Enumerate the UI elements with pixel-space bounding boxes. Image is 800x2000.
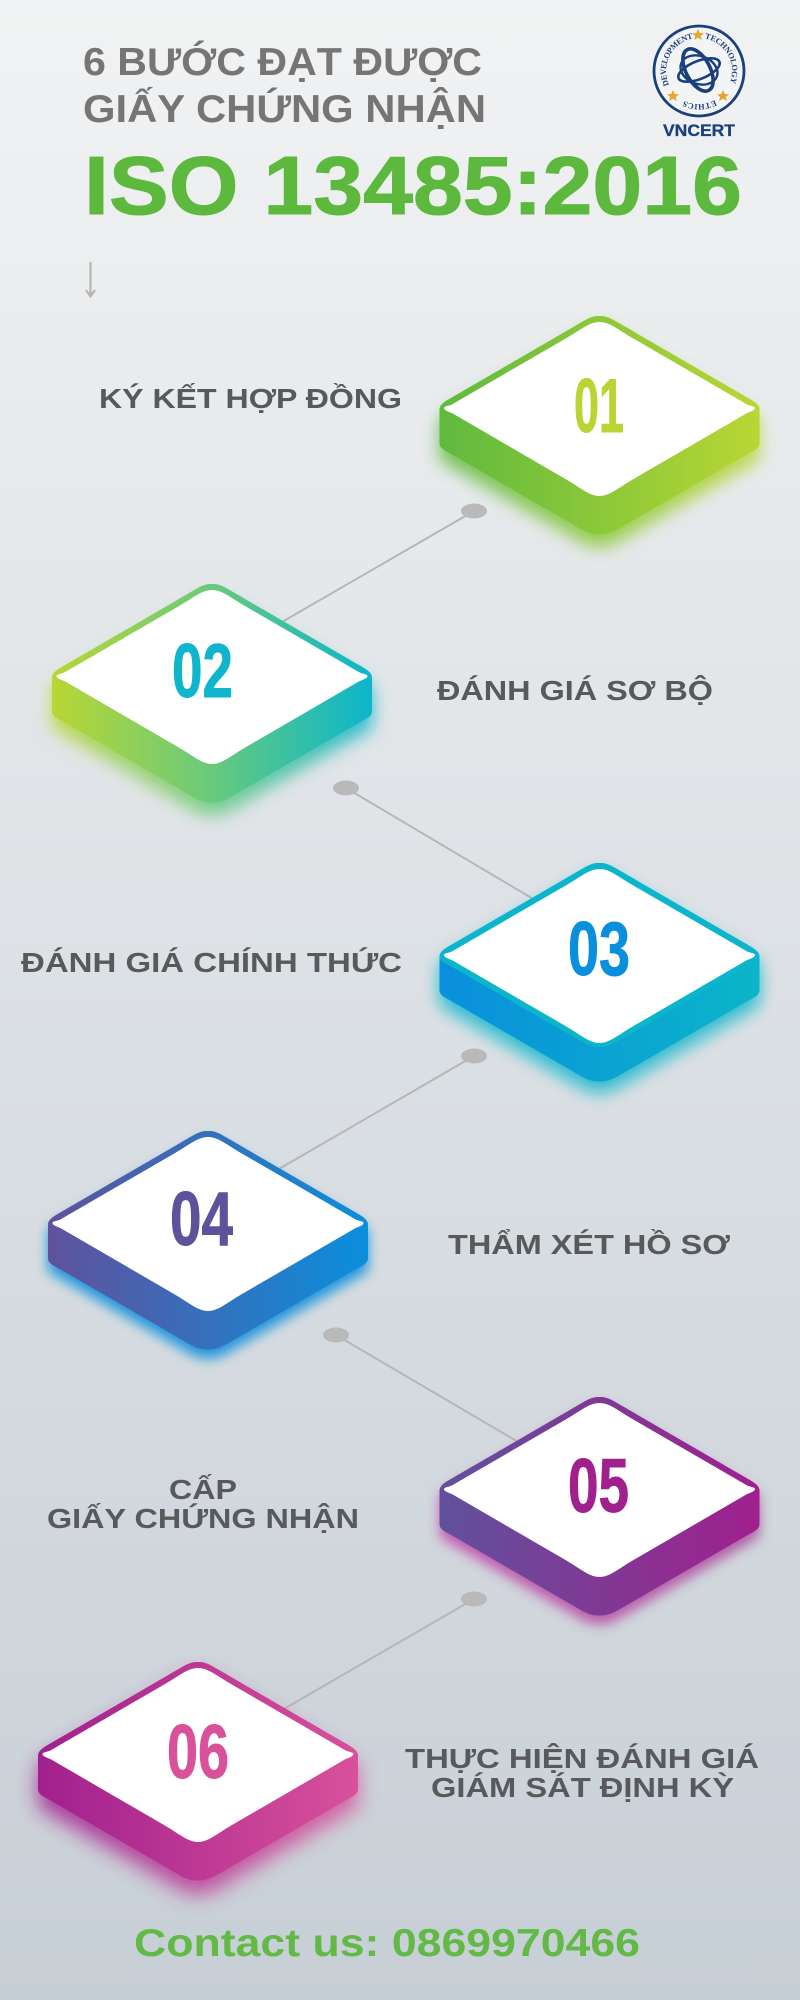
step 02 tile — [52, 584, 372, 816]
connector: step 1 to step 2 — [275, 504, 487, 626]
connector: step 2 to step 3 — [333, 780, 540, 903]
step 06 label — [405, 1743, 759, 1803]
step 02 number: 02 — [172, 629, 233, 714]
step 02 label: ĐÁNH GIÁ SƠ BỘ — [437, 674, 713, 706]
title: ISO 13485:2016: ISO 13485:2016 — [84, 139, 742, 232]
step 05 label: CẤP — [169, 1474, 237, 1505]
step 04 number: 04 — [170, 1177, 233, 1262]
title: 6 bước đạt được giấy chứng nhận — [83, 40, 486, 131]
step 03 number: 03 — [568, 907, 630, 992]
logo: VNCERT seal: DEVELOPMENT — [660, 33, 692, 87]
step 05 tile — [440, 1397, 760, 1624]
connector: step 5 to step 6 — [277, 1592, 487, 1713]
step 01 number: 01 — [574, 364, 624, 449]
contact line: Contact us: 0869970466 — [134, 1922, 640, 1965]
step 06 label: GIÁM SÁT ĐỊNH KỲ — [431, 1772, 734, 1803]
title: 6 bước đạt được giấy chứng nhận: GIẤY CHỨNG NHẬN — [83, 87, 486, 131]
logo: VNCERT seal — [652, 24, 746, 140]
step 06 label: THỰC HIỆN ĐÁNH GIÁ — [405, 1743, 759, 1774]
title: 6 bước đạt được giấy chứng nhận: 6 BƯỚC ĐẠT ĐƯỢC — [83, 40, 482, 84]
step 05 number: 05 — [568, 1444, 629, 1529]
connector: step 3 to step 4 — [272, 1048, 487, 1173]
step 01 label: KÝ KẾT HỢP ĐỒNG — [99, 383, 402, 414]
connector: step 4 to step 5 — [323, 1328, 525, 1446]
step 04 label: THẨM XÉT HỒ SƠ — [448, 1229, 730, 1260]
step 06 tile — [38, 1662, 358, 1894]
step 04 tile — [48, 1131, 368, 1358]
step 03 label: ĐÁNH GIÁ CHÍNH THỨC — [21, 947, 402, 978]
logo: VNCERT seal: ETHICS — [682, 100, 718, 110]
step 03 tile — [440, 863, 760, 1092]
step 05 label: GIẤY CHỨNG NHẬN — [47, 1503, 359, 1534]
step 05 label — [47, 1474, 359, 1534]
arrow: down — [86, 262, 95, 296]
logo: VNCERT seal: VNCERT — [663, 121, 736, 140]
logo: VNCERT seal: TECHNOLOGY — [706, 33, 738, 84]
step 06 number: 06 — [167, 1710, 229, 1795]
step 01 tile — [440, 316, 760, 548]
